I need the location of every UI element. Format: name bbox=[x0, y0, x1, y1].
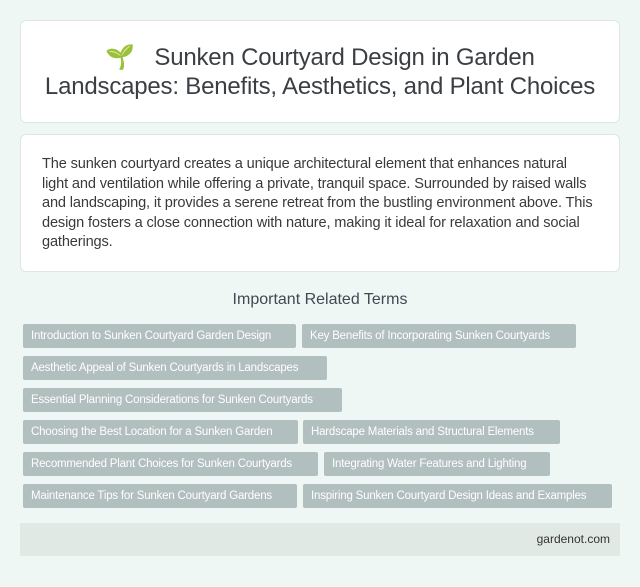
tag 9: Maintenance Tips for Sunken Courtyard Gardens bbox=[31, 490, 272, 502]
description text: The sunken courtyard creates a unique architectural element that enhances natural bbox=[42, 156, 567, 172]
tag 3 bbox=[23, 356, 327, 380]
tag 7: Recommended Plant Choices for Sunken Courtyards bbox=[31, 458, 292, 470]
tag 10: Inspiring Sunken Courtyard Design Ideas and Examples bbox=[311, 490, 586, 502]
description text bbox=[42, 156, 592, 250]
tag 1 bbox=[23, 324, 296, 348]
section heading: Important Related Terms bbox=[233, 291, 407, 308]
tag 5: Choosing the Best Location for a Sunken Garden bbox=[31, 426, 272, 438]
tag 4: Essential Planning Considerations for Sunken Courtyards bbox=[31, 394, 313, 406]
title bbox=[45, 44, 595, 100]
tag 8: Integrating Water Features and Lighting bbox=[332, 458, 526, 470]
tag 8 bbox=[324, 452, 550, 476]
title: 🌱 Sunken Courtyard Design in Garden bbox=[105, 44, 535, 71]
tag 6 bbox=[303, 420, 560, 444]
header card bbox=[20, 20, 620, 123]
description card bbox=[20, 134, 620, 272]
tag 9 bbox=[23, 484, 297, 508]
tag 6: Hardscape Materials and Structural Elements bbox=[311, 426, 534, 438]
description text: gatherings. bbox=[42, 234, 113, 250]
title: Landscapes: Benefits, Aesthetics, and Plant Choices bbox=[45, 73, 595, 100]
tag 4 bbox=[23, 388, 342, 412]
tag 10 bbox=[303, 484, 612, 508]
tag 7 bbox=[23, 452, 318, 476]
footer text: gardenot.com bbox=[537, 532, 610, 546]
footer bbox=[20, 523, 620, 556]
tag 5 bbox=[23, 420, 298, 444]
description text: design fosters a close connection with nature, making it ideal for relaxation and social bbox=[42, 214, 580, 230]
description text: light and ventilation while offering a private, tranquil space. Surrounded by raised walls bbox=[42, 176, 586, 192]
tag 2 bbox=[302, 324, 576, 348]
tag 3: Aesthetic Appeal of Sunken Courtyards in Landscapes bbox=[31, 362, 298, 374]
tag 2: Key Benefits of Incorporating Sunken Courtyards bbox=[310, 330, 550, 342]
description text: and landscaping, it provides a serene retreat from the bustling environment above. This bbox=[42, 195, 592, 211]
tag 1: Introduction to Sunken Courtyard Garden Design bbox=[31, 330, 271, 342]
